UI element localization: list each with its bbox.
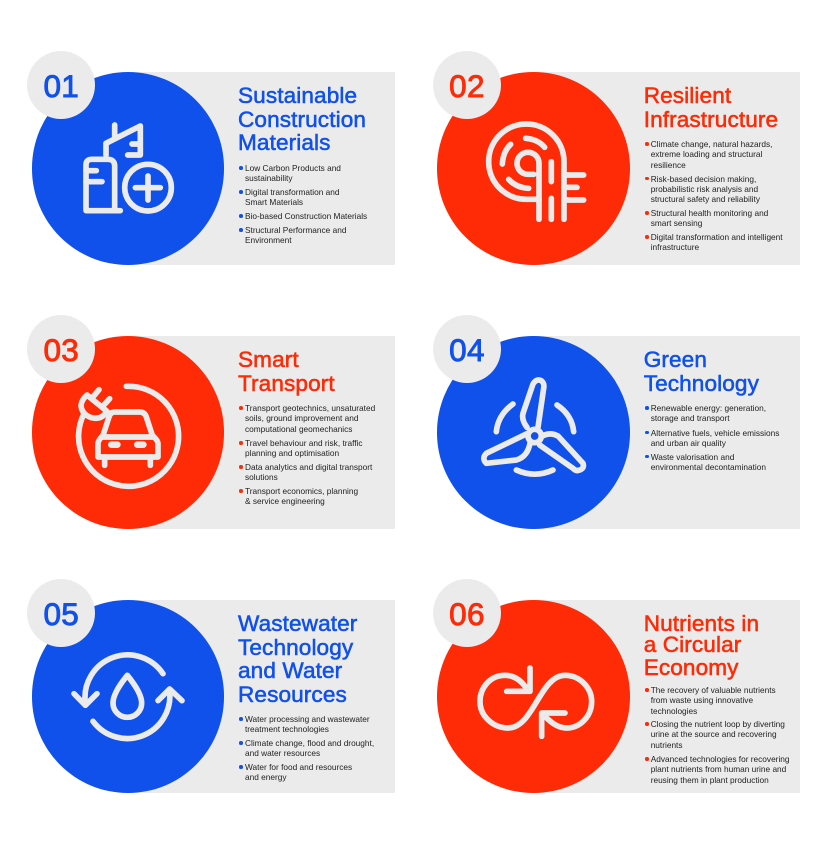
bullet: Structural health monitoring and xyxy=(651,208,768,218)
bullet: extreme loading and structural xyxy=(651,149,762,159)
icon: fingerprint structure xyxy=(486,121,586,222)
bullet: resilience xyxy=(651,160,686,170)
bullet: Bio-based Construction Materials xyxy=(245,211,367,221)
bullet xyxy=(239,438,363,458)
bullet: & service engineering xyxy=(245,496,325,506)
number badge 03: 03 xyxy=(43,332,79,368)
bullet: Risk-based decision making, xyxy=(651,174,756,184)
bullet: Smart Materials xyxy=(245,197,303,207)
icon: factory with plus xyxy=(83,122,174,214)
heading xyxy=(238,347,335,396)
bullet xyxy=(239,225,346,245)
bullet: planning and optimisation xyxy=(245,448,339,458)
bullet: Low Carbon Products and xyxy=(245,163,341,173)
bullet xyxy=(645,719,785,750)
bullet: Water processing and wastewater xyxy=(245,714,370,724)
bullet: Travel behaviour and risk, traffic xyxy=(245,438,363,448)
heading: Resources xyxy=(238,682,347,707)
bullet: technologies xyxy=(651,706,697,716)
bullet xyxy=(645,685,776,716)
bullet: Structural Performance and xyxy=(245,225,346,235)
bullet xyxy=(239,462,372,482)
heading: Smart xyxy=(238,347,299,372)
icon: wind turbine xyxy=(481,377,586,477)
heading: Sustainable xyxy=(238,83,357,108)
number badge 02: 02 xyxy=(449,68,485,104)
bullet: Alternative fuels, vehicle emissions xyxy=(651,428,779,438)
bullet xyxy=(645,452,766,472)
bullet: sustainability xyxy=(245,173,292,183)
circle xyxy=(32,600,224,793)
number badge 02 xyxy=(433,51,501,119)
panel background xyxy=(128,600,395,793)
number badge 01: 01 xyxy=(43,68,79,104)
bullet: solutions xyxy=(245,472,278,482)
heading: Transport xyxy=(238,371,335,396)
heading: Construction xyxy=(238,107,366,132)
bullet: Climate change, natural hazards, xyxy=(651,139,772,149)
bullet: Transport economics, planning xyxy=(245,486,358,496)
bullet xyxy=(239,738,374,758)
heading xyxy=(238,83,366,155)
number badge 05 xyxy=(27,579,95,647)
bullet xyxy=(239,714,370,734)
bullet xyxy=(239,187,340,207)
circle xyxy=(32,336,224,529)
heading: Infrastructure xyxy=(644,107,778,132)
heading xyxy=(644,611,759,680)
bullet: computational geomechanics xyxy=(245,424,352,434)
icon: infinity loop arrows xyxy=(477,665,594,740)
bullet: Environment xyxy=(245,235,292,245)
panel background xyxy=(128,336,395,529)
bullet: storage and transport xyxy=(651,413,730,423)
bullet xyxy=(239,762,352,782)
panel: 06 nutrients in a circular economy xyxy=(433,579,800,793)
bullet: from waste using innovative xyxy=(651,695,753,705)
heading: Economy xyxy=(644,655,739,680)
bullet xyxy=(645,232,783,252)
bullet: infrastructure xyxy=(651,242,699,252)
bullet: soils, ground improvement and xyxy=(245,413,358,423)
bullet: smart sensing xyxy=(651,218,702,228)
bullet: and urban air quality xyxy=(651,438,726,448)
bullet: probabilistic risk analysis and xyxy=(651,184,758,194)
heading xyxy=(644,83,778,132)
heading: Nutrients in xyxy=(644,611,759,636)
icon: electric car with plug xyxy=(76,384,182,490)
icon: water drop cycle xyxy=(71,652,185,742)
heading xyxy=(644,347,760,396)
heading: Technology xyxy=(238,635,353,660)
heading: Resilient xyxy=(644,83,731,108)
bullet: Advanced technologies for recovering xyxy=(651,754,790,764)
panel background xyxy=(128,72,395,265)
bullet: structural safety and reliability xyxy=(651,194,760,204)
bullet xyxy=(645,754,790,785)
bullet xyxy=(645,208,768,228)
bullet: and energy xyxy=(245,772,287,782)
number badge 04 xyxy=(433,315,501,383)
circle xyxy=(437,600,630,793)
bullet: Waste valorisation and xyxy=(651,452,734,462)
bullet: treatment technologies xyxy=(245,724,329,734)
bullet: Transport geotechnics, unsaturated xyxy=(245,403,375,413)
bullet: The recovery of valuable nutrients xyxy=(651,685,776,695)
heading xyxy=(238,611,358,707)
bullet: reusing them in plant production xyxy=(651,775,769,785)
bullet xyxy=(645,174,760,204)
bullet xyxy=(239,486,358,506)
panel: 04 green technology xyxy=(433,315,800,529)
number badge 05: 05 xyxy=(43,596,79,632)
bullet: Water for food and resources xyxy=(245,762,352,772)
panel background xyxy=(534,72,800,265)
panel: 05 wastewater technology and water resources xyxy=(27,579,395,793)
number badge 03 xyxy=(27,315,95,383)
circle xyxy=(32,72,224,265)
heading: Materials xyxy=(238,130,331,155)
panel background xyxy=(534,336,800,529)
bullet: environmental decontamination xyxy=(651,462,766,472)
bullet: Data analytics and digital transport xyxy=(245,462,372,472)
bullet: Digital transformation and xyxy=(245,187,340,197)
bullet: Digital transformation and intelligent xyxy=(651,232,783,242)
bullet: and water resources xyxy=(245,748,320,758)
bullet: nutrients xyxy=(651,740,683,750)
panel: 03 smart transport xyxy=(27,315,395,529)
panel background xyxy=(534,600,800,793)
bullet: urine at the source and recovering xyxy=(651,729,777,739)
panel: 02 resilient infrastructure xyxy=(433,51,800,265)
bullet: Climate change, flood and drought, xyxy=(245,738,374,748)
heading: a Circular xyxy=(644,632,741,657)
heading: Technology xyxy=(644,371,759,396)
bullet xyxy=(645,428,780,448)
number badge 06: 06 xyxy=(449,596,485,632)
heading: Wastewater xyxy=(238,611,357,636)
circle xyxy=(437,72,630,265)
bullet xyxy=(239,163,341,183)
number badge 04: 04 xyxy=(449,332,485,368)
circle xyxy=(437,336,630,529)
bullet xyxy=(645,403,766,423)
heading: Green xyxy=(644,347,707,372)
bullet: Closing the nutrient loop by diverting xyxy=(651,719,785,729)
heading: and Water xyxy=(238,658,342,683)
bullet xyxy=(239,403,375,434)
bullet: plant nutrients from human urine and xyxy=(651,764,786,774)
bullet: Renewable energy: generation, xyxy=(651,403,766,413)
panel: 01 sustainable construction materials xyxy=(27,51,395,265)
bullet xyxy=(645,139,772,170)
number badge 06 xyxy=(433,579,501,647)
number badge 01 xyxy=(27,51,95,119)
